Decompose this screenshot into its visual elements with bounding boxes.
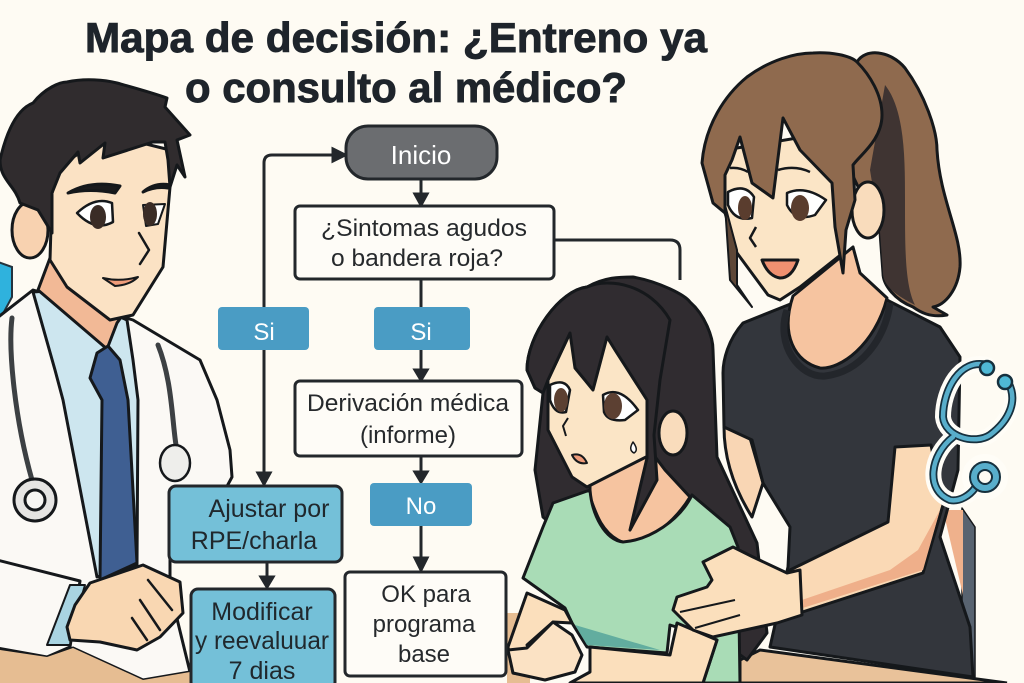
node: Inicio: [346, 126, 497, 179]
woman neck: [788, 247, 887, 368]
doctor face: [50, 135, 170, 320]
girl eyes: [550, 382, 638, 420]
woman hair: [702, 53, 882, 273]
girl face: [548, 330, 650, 487]
table center: [507, 613, 530, 683]
node: ajustar por RPE: [169, 486, 342, 562]
woman back arm: [943, 510, 963, 595]
doctor stethoscope: [11, 318, 176, 480]
woman forearm shadow: [790, 510, 940, 612]
woman brows and nose: [730, 168, 810, 247]
woman ponytail: [850, 53, 960, 316]
node: síntomas agudos: ¿Sintomas agudos: [321, 215, 527, 242]
woman side lock: [725, 205, 752, 307]
node: modificar y reevaluar: y reevaluuar: [195, 627, 329, 655]
girl shirt shadow: [575, 625, 660, 650]
doctor ear: [12, 202, 48, 258]
node: modificar y reevaluar: [191, 589, 335, 683]
woman chair: [962, 508, 975, 677]
girl ear: [659, 411, 687, 455]
flowchart arrows: [258, 149, 680, 587]
woman ear: [852, 182, 884, 238]
doctor tie: [90, 346, 137, 580]
node: Inicio: Inicio: [391, 140, 451, 170]
doctor coat: [0, 290, 232, 680]
node: modificar y reevaluar: Modificar: [211, 598, 313, 626]
woman collar: [784, 303, 890, 376]
woman face: [725, 130, 845, 300]
illustration: woman: [702, 53, 975, 677]
doctor brows, nose and mouth: [68, 184, 170, 286]
node: síntomas agudos: o bandera roja?: [331, 245, 503, 272]
illustration: girl: [508, 277, 767, 683]
doctor shirt: [33, 290, 138, 577]
icon: stethoscope: [933, 361, 1012, 500]
table right: [740, 650, 1007, 683]
title: o consulto al médico?: [185, 64, 627, 111]
doctor sleeve: [0, 560, 80, 657]
label: Si left: Si: [253, 319, 275, 346]
label: No: [370, 483, 472, 526]
node: ajustar por RPE: RPE/charla: [191, 527, 317, 555]
node: ajustar por RPE: Ajustar por: [209, 495, 329, 523]
girl fist: [508, 622, 582, 680]
doctor cuff: [47, 585, 85, 645]
title: Mapa de decisión: ¿Entreno ya: [85, 14, 708, 61]
icon: shield: [0, 262, 12, 323]
woman mouth: [762, 260, 798, 278]
woman forearm: [775, 445, 943, 617]
doctor eyes: [77, 201, 165, 229]
woman torso: [723, 300, 973, 677]
node: derivación médica: (informe): [360, 422, 456, 449]
girl neck: [590, 450, 690, 543]
girl arm right: [570, 623, 717, 683]
node: OK para programa base: base: [398, 641, 450, 668]
node: síntomas agudos: [295, 206, 554, 279]
label: Si center: [374, 307, 470, 350]
girl back hair: [527, 277, 767, 660]
label: Si center: Si: [410, 319, 432, 346]
title: [85, 14, 708, 111]
doctor hair: [0, 80, 190, 233]
girl sweat drop: [631, 442, 636, 453]
girl shirt: [523, 490, 740, 683]
woman ponytail shadow: [870, 85, 915, 305]
node: OK para programa base: programa: [373, 611, 476, 638]
node: derivación médica: Derivación médica: [307, 390, 510, 417]
label: Si left: [218, 307, 309, 350]
label: No: No: [406, 493, 436, 520]
girl arm left: [508, 593, 572, 678]
node: OK para programa base: OK para: [381, 581, 471, 608]
girl bangs: [527, 283, 670, 530]
node: OK para programa base: [345, 572, 506, 676]
doctor neck: [38, 258, 133, 349]
illustration: doctor: [0, 80, 232, 680]
node: derivación médica: [295, 381, 522, 456]
woman upper arm left: [724, 427, 763, 517]
woman eyes: [728, 188, 826, 221]
table left: [0, 648, 190, 683]
doctor hand: [67, 565, 183, 650]
illustration: woman hand: [673, 547, 802, 637]
girl mouth: [572, 454, 587, 463]
girl nose: [563, 418, 568, 436]
